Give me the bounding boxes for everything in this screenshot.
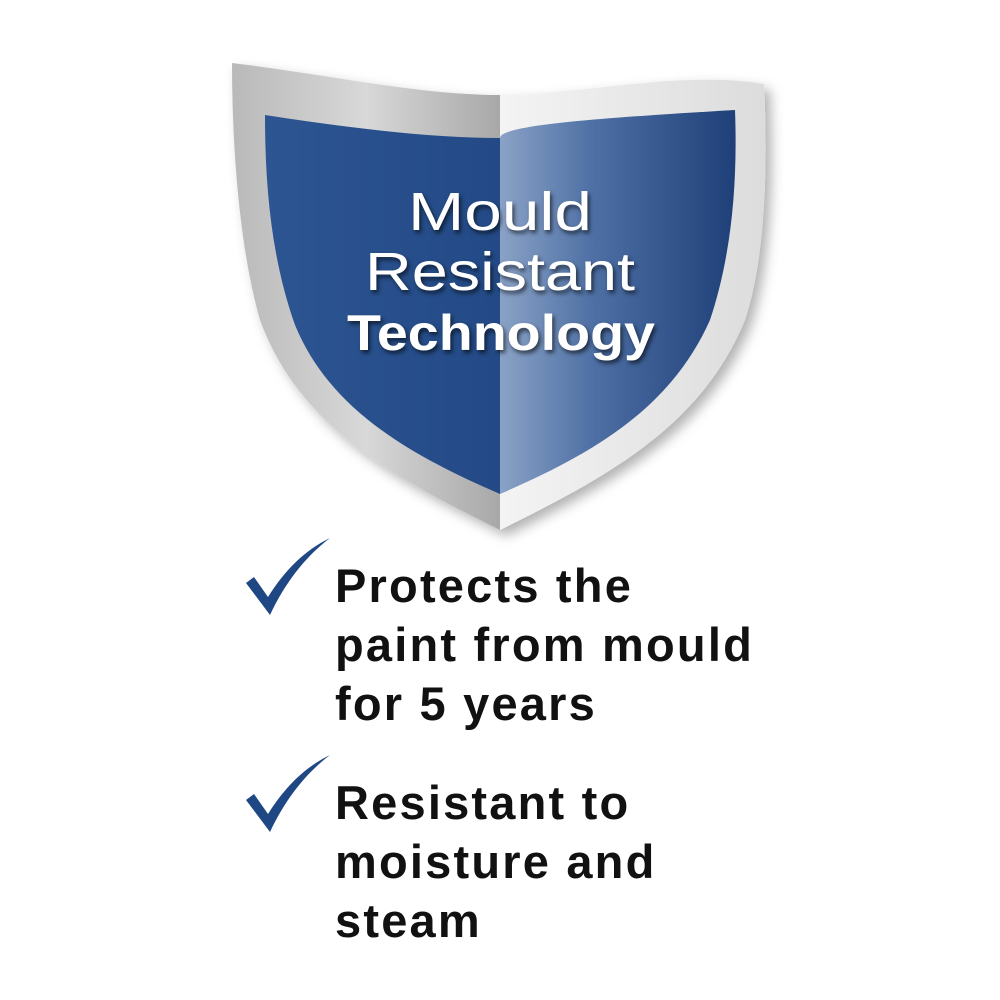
benefit 1 text: paint from mould [335,618,754,671]
benefit 1 text [335,559,754,730]
shield title: Mould [408,182,592,242]
check icon 2 [246,755,330,832]
benefit 2 text [335,776,657,947]
check icon 1 [246,538,330,615]
benefit 1 text: for 5 years [335,677,597,730]
benefit 2 text: moisture and [335,835,657,888]
benefit 2 text: Resistant to [335,776,630,829]
shield title: Technology [347,305,655,361]
shield [231,63,778,541]
benefit 1 text: Protects the [335,559,633,612]
benefit 2 text: steam [335,894,482,947]
shield title [347,182,655,361]
shield title: Resistant [365,242,635,302]
